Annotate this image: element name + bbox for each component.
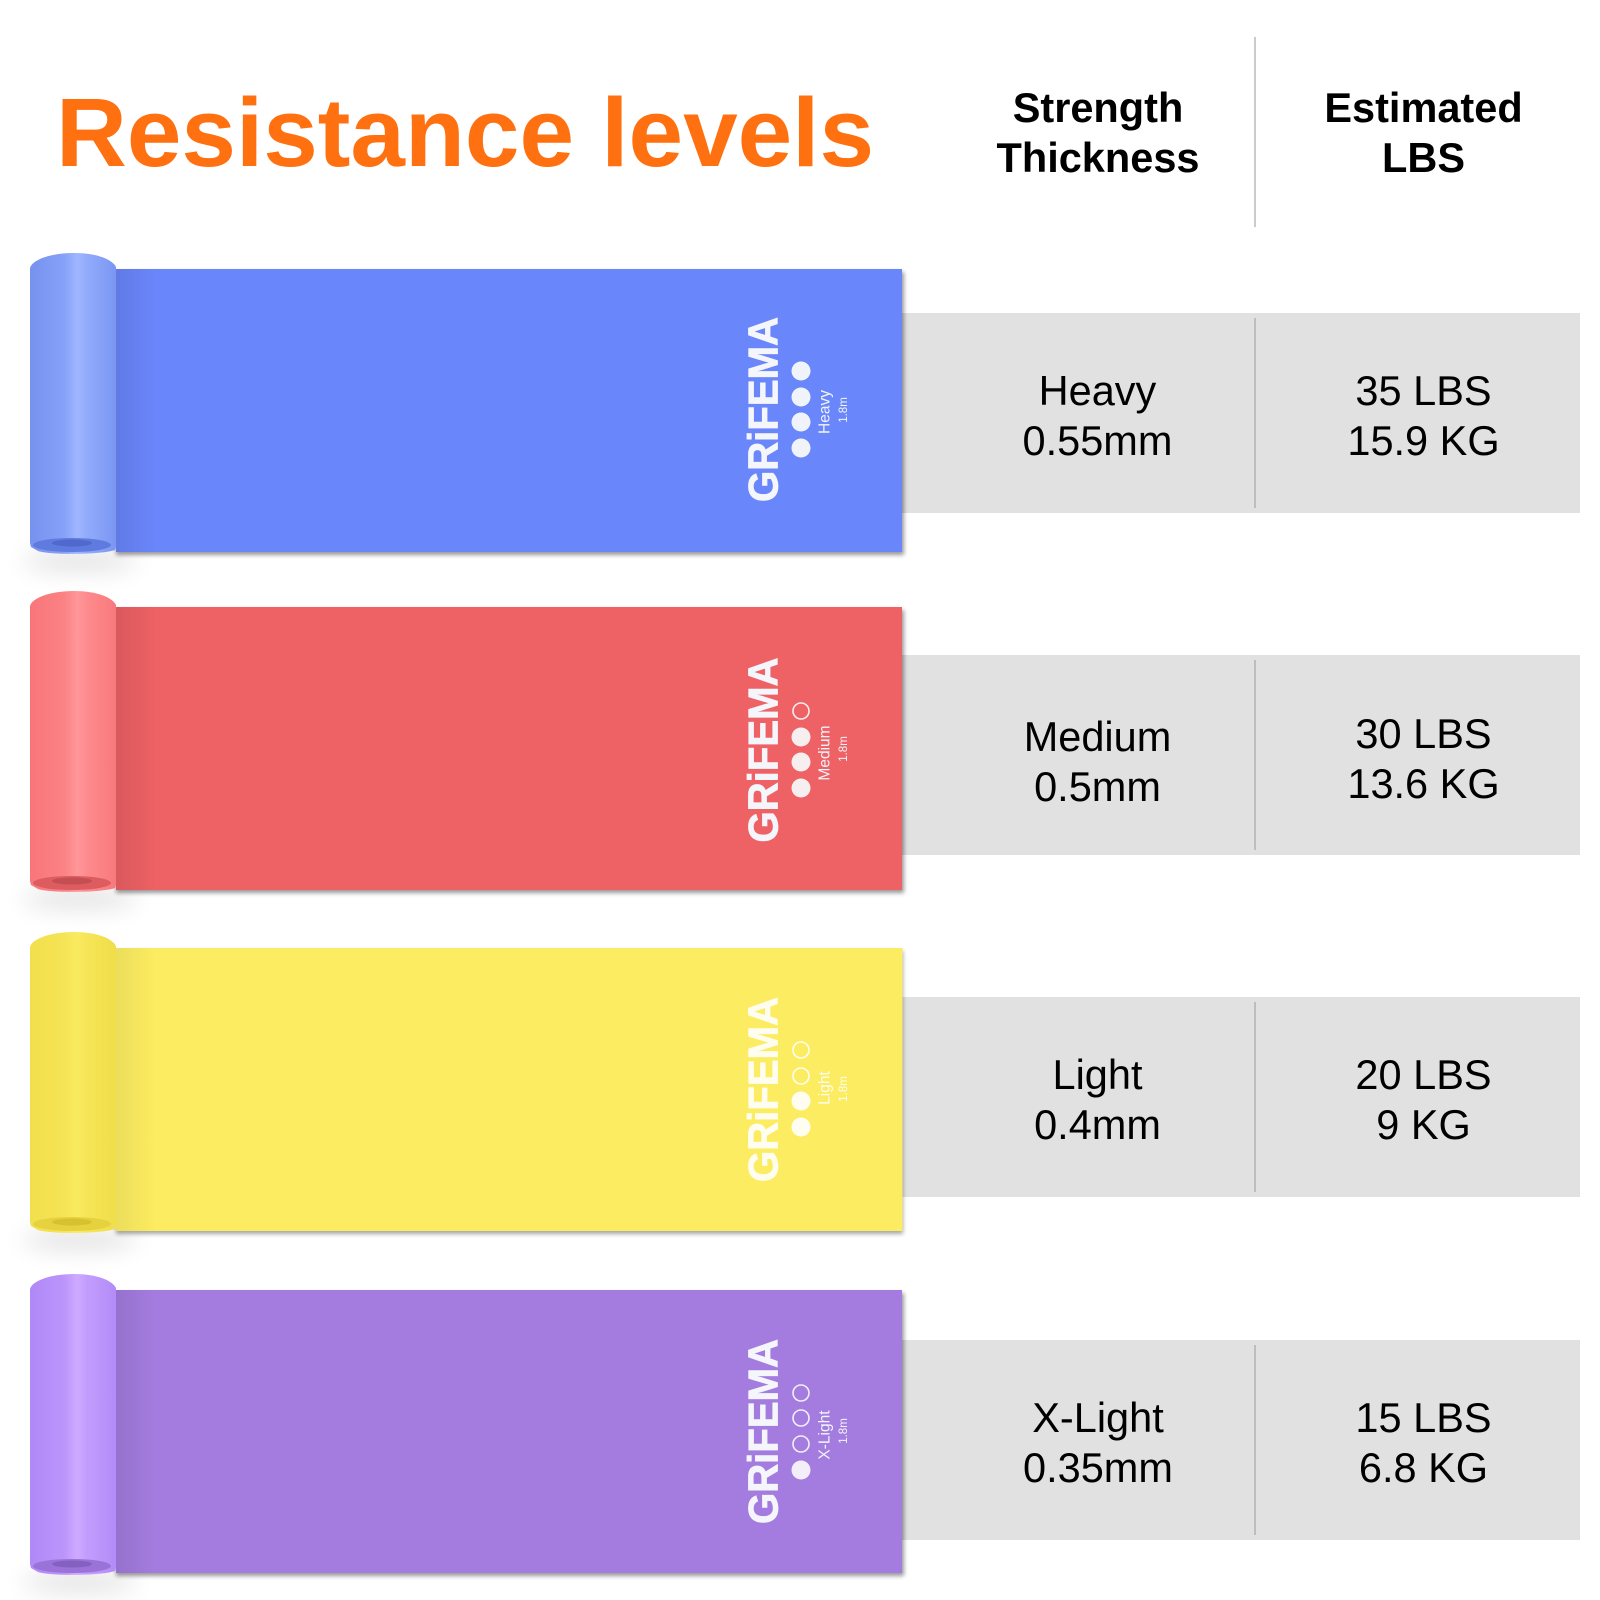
title: Resistance levels [56,78,874,187]
roll [30,591,116,892]
table row: light: 9 KG [1376,1101,1471,1148]
length label: 1.8m [838,1076,850,1102]
table row: light [902,997,1580,1197]
table row: medium: 13.6 KG [1347,760,1500,807]
table row: heavy: Heavy [1039,367,1157,414]
roll [30,253,116,554]
table row: medium: Medium [1024,713,1171,760]
column heading: estimated LBS: Estimated [1324,84,1523,131]
band: purple x-light [22,1274,904,1591]
table row: medium: 30 LBS [1355,710,1492,757]
table row: x-light: 0.35mm [1023,1444,1173,1491]
roll [30,932,116,1233]
roll [30,1274,116,1575]
length label: 1.8m [838,397,850,423]
table row: heavy: 0.55mm [1023,417,1172,464]
table row: medium [902,655,1580,855]
table row: heavy: 15.9 KG [1347,417,1500,464]
band: red medium [22,591,904,908]
table row: heavy [902,313,1580,513]
length label: 1.8m [838,736,850,762]
table row: x-light: X-Light [1032,1394,1164,1441]
logo: GRiFEMA [740,658,786,842]
strength dots [792,1385,810,1480]
strength dots [792,1042,810,1136]
table row: light: 0.4mm [1034,1101,1161,1148]
table row: heavy: 35 LBS [1355,367,1492,414]
band: blue heavy [22,253,904,570]
band: yellow light [22,932,903,1249]
length label: 1.8m [838,1418,850,1444]
column heading: estimated LBS: LBS [1382,134,1465,181]
column heading: strength thickness: Thickness [997,134,1199,181]
strength dots [792,703,810,798]
table row: x-light [902,1340,1580,1540]
logo: GRiFEMA [740,997,786,1182]
strength dots [792,362,810,458]
column heading: strength thickness [997,84,1199,181]
table row: light: Light [1052,1051,1143,1098]
table row: x-light: 6.8 KG [1359,1444,1488,1491]
column heading: strength thickness: Strength [1013,84,1183,131]
table row: medium: 0.5mm [1034,763,1161,810]
table row: light: 20 LBS [1355,1051,1492,1098]
level label: Medium [816,725,834,781]
logo: GRiFEMA [740,317,786,502]
level label: X-Light [816,1410,834,1460]
level label: Light [816,1071,834,1105]
table row: x-light: 15 LBS [1355,1394,1492,1441]
level label: Heavy [816,390,834,434]
column heading: estimated LBS [1324,84,1523,181]
logo: GRiFEMA [740,1339,786,1524]
